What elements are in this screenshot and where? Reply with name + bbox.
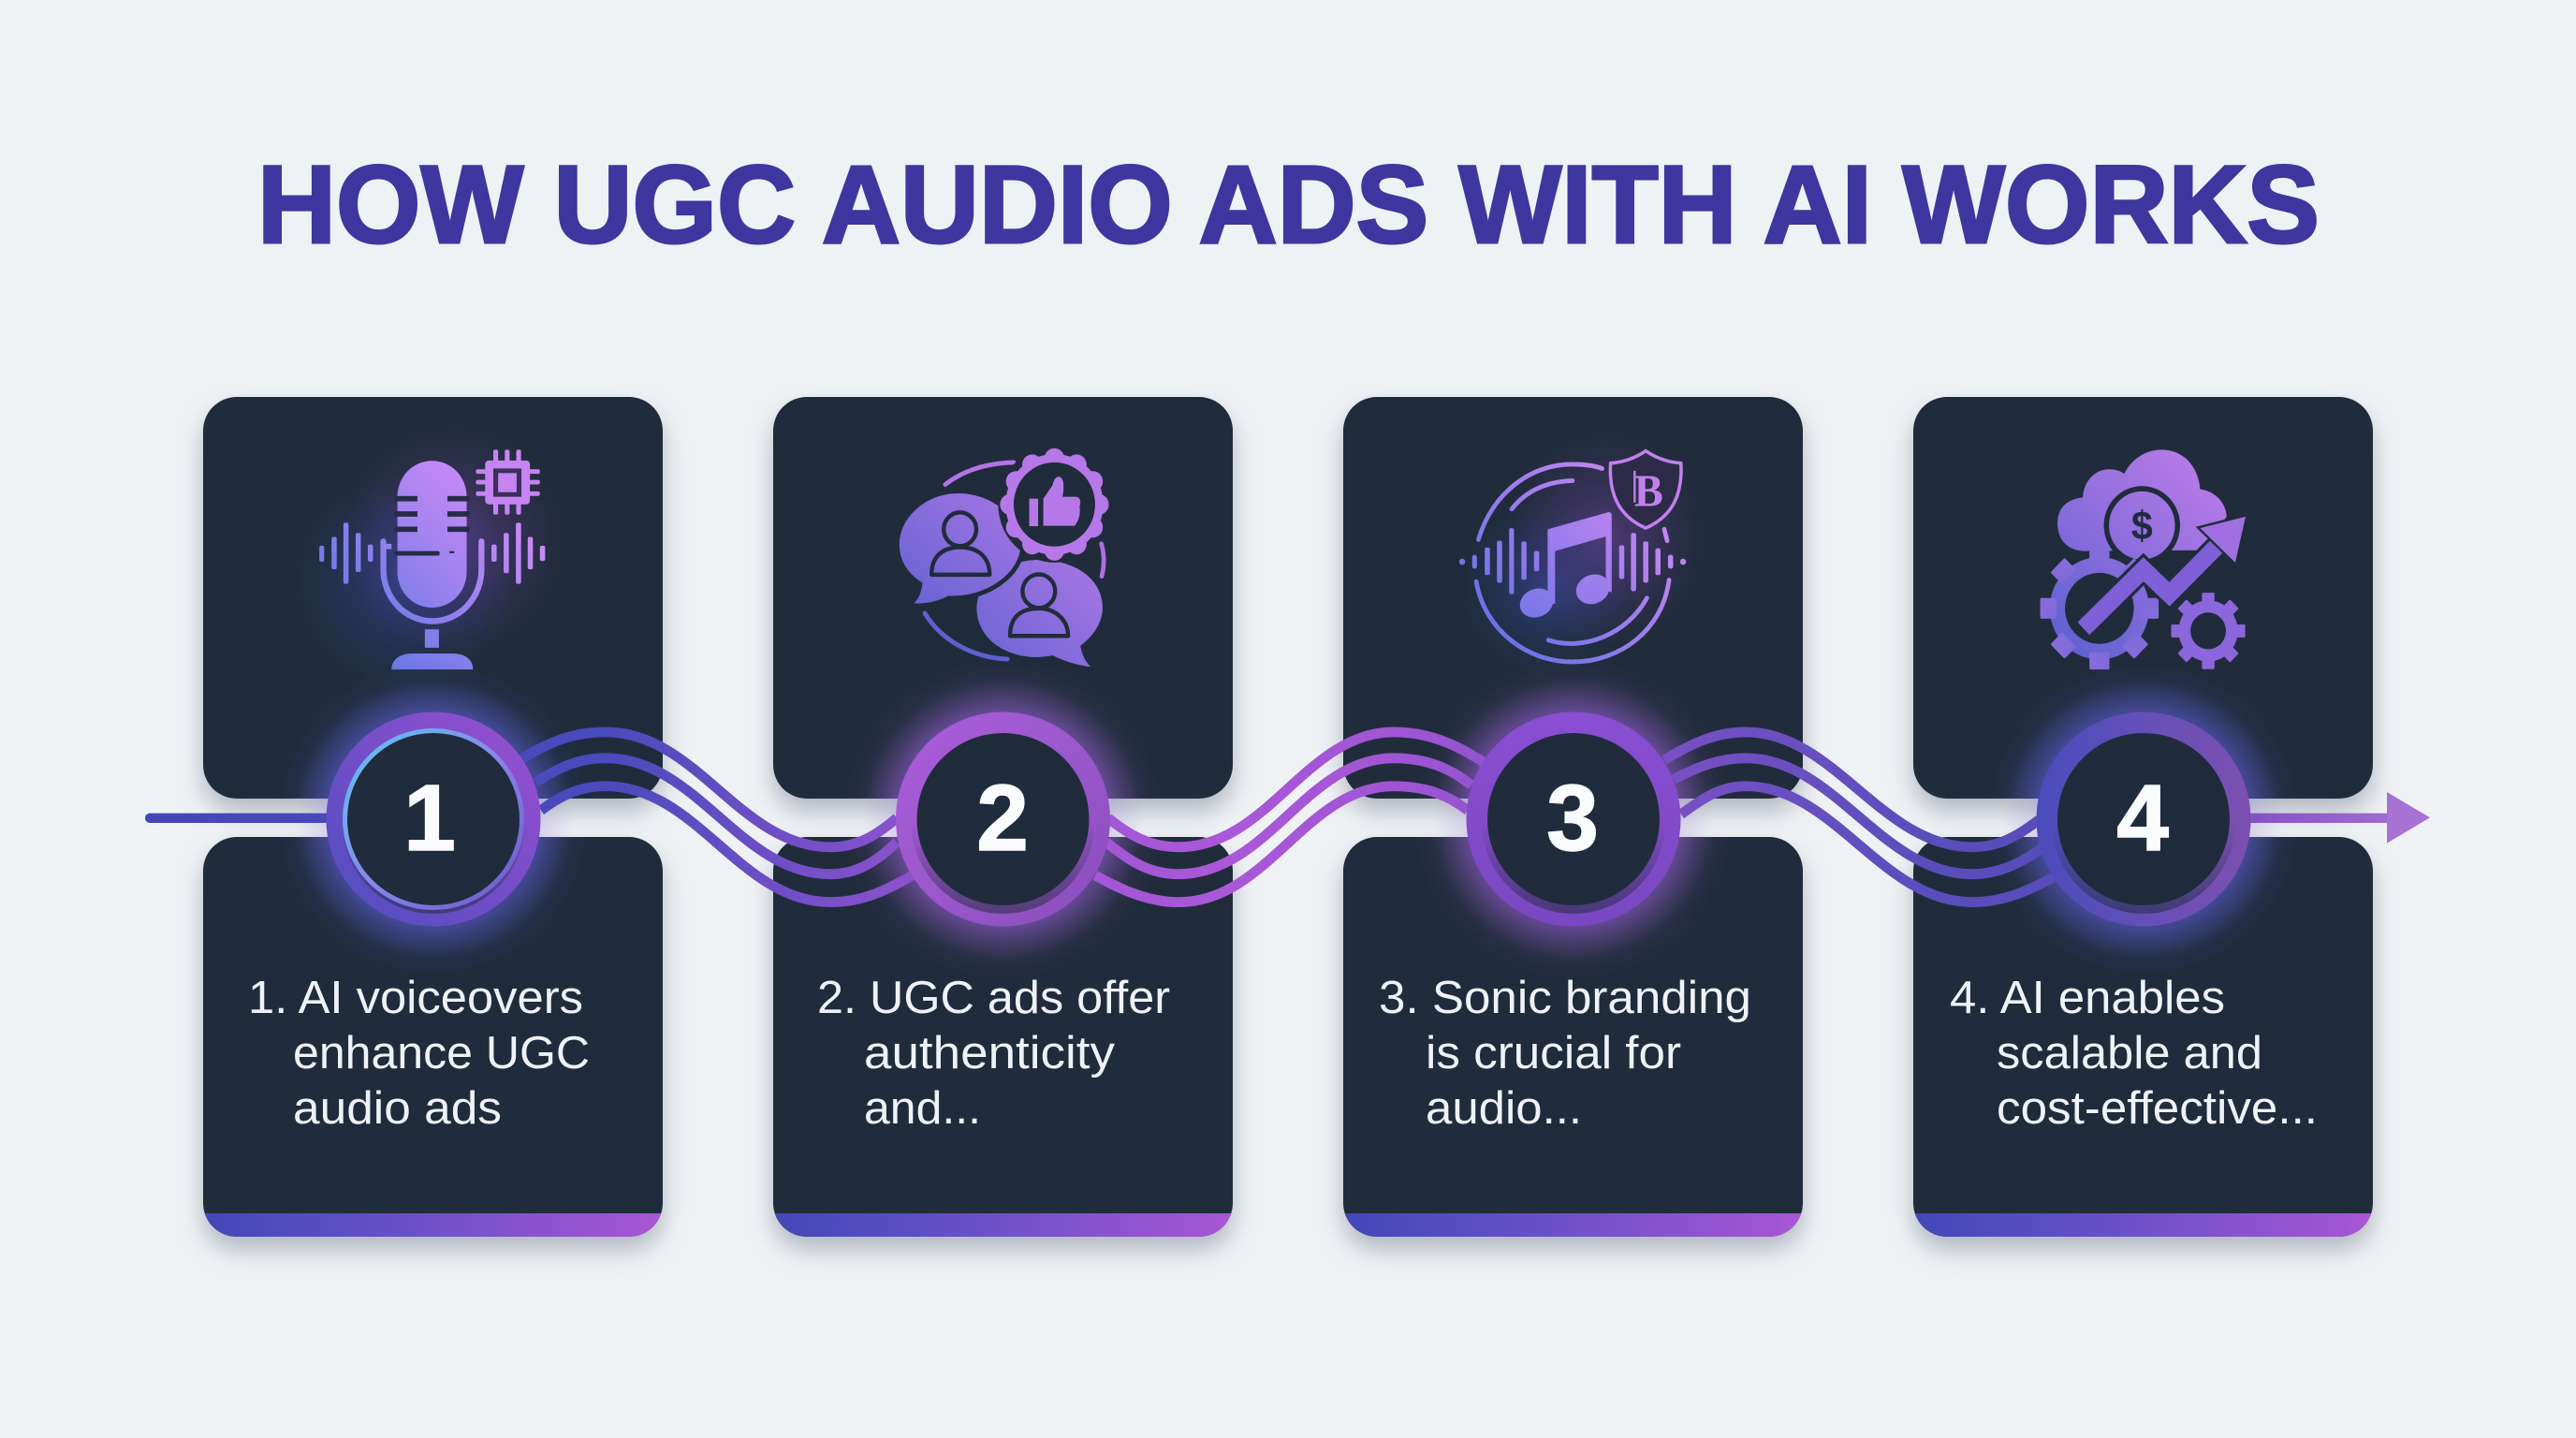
text: step 4: scalable and — [1997, 1028, 2262, 1078]
node 4: 4 — [2116, 766, 2169, 871]
text: step 2: and... — [864, 1083, 981, 1134]
panel: step 1 text card — [203, 837, 663, 1237]
node glows on cards — [272, 658, 2305, 980]
text: step 1: enhance UGC — [293, 1028, 590, 1078]
node 3: 3 — [1546, 766, 1599, 871]
text: step 1: audio ads — [293, 1083, 502, 1134]
panel: step 2 text card — [773, 837, 1233, 1237]
icon: music note with sound wave ring and brand shield: B — [1634, 467, 1663, 517]
icon: cloud with dollar coin, gears and growth arrow — [2041, 449, 2246, 669]
node 2: 2 — [976, 766, 1029, 871]
text: step 4: 4. AI enables — [1950, 973, 2225, 1023]
text: step 3: audio... — [1426, 1083, 1582, 1134]
icon: music note with sound wave ring and brand shield — [1457, 432, 1705, 676]
node 4 — [2037, 712, 2250, 927]
title: HOW UGC AUDIO ADS WITH AI WORKS — [257, 143, 2320, 267]
panel: step 4 text card — [1913, 837, 2373, 1237]
arrow: flowing timeline with wave lines — [150, 732, 2430, 902]
panel: step 1 icon card — [203, 397, 663, 799]
panel: step 3 text card — [1343, 837, 1803, 1237]
text: step 4 — [1950, 973, 2318, 1134]
gradient accent bars along card bottoms — [203, 1213, 2373, 1237]
panel: step 2 icon card — [773, 397, 1233, 799]
text: step 2 — [817, 973, 1170, 1134]
text: step 3: 3. Sonic branding — [1379, 973, 1751, 1023]
icon: chat bubbles with thumbs-up badge — [897, 447, 1111, 667]
text: step 2: 2. UGC ads offer — [817, 973, 1170, 1023]
text: step 1 — [248, 973, 590, 1134]
node glows in gaps between cards — [293, 679, 2284, 960]
node 3 — [1466, 712, 1681, 927]
icon: microphone with AI chip and sound waves — [291, 424, 564, 692]
node 1: 1 — [403, 766, 456, 871]
icon: cloud with dollar coin, gears and growth arrow: $ — [2131, 503, 2153, 548]
text: step 3 — [1379, 973, 1751, 1134]
text: step 2: authenticity — [864, 1028, 1116, 1078]
panel: step 3 icon card — [1343, 397, 1803, 799]
text: step 1: 1. AI voiceovers — [248, 973, 583, 1023]
panel: step 4 icon card — [1913, 397, 2373, 799]
node 1 — [326, 712, 541, 927]
text: step 4: cost-effective... — [1997, 1083, 2318, 1134]
node 2 — [896, 712, 1110, 927]
text: step 3: is crucial for — [1426, 1028, 1681, 1078]
